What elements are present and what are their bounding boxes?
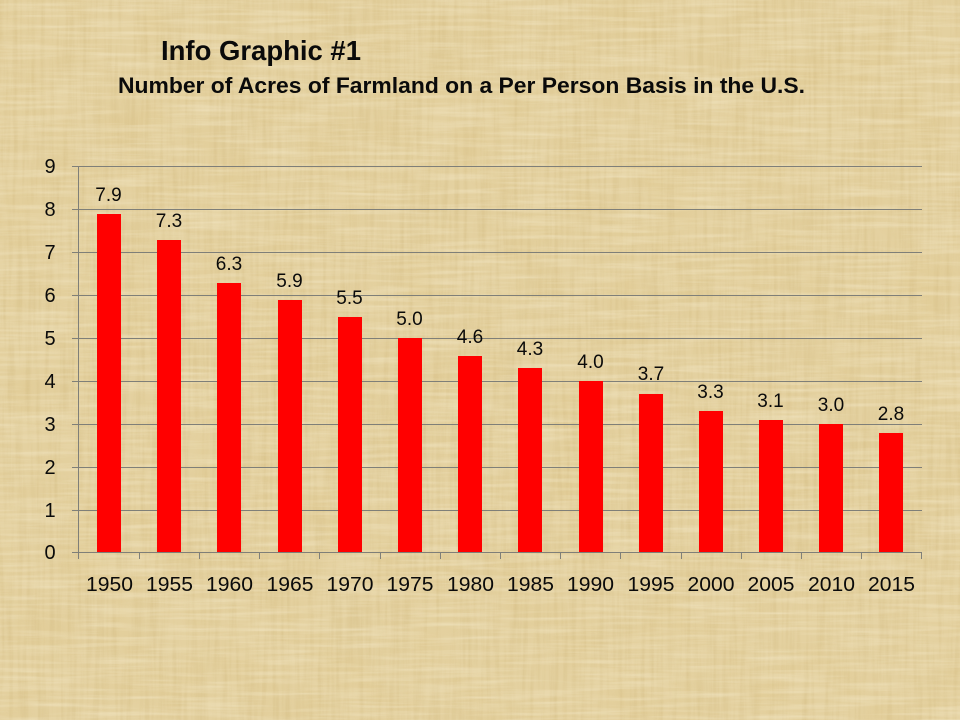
y-axis labels: 5: [44, 328, 56, 350]
bar chart: [44, 156, 922, 596]
value labels: 2.8: [878, 404, 904, 425]
x-axis labels: 2005: [748, 574, 794, 596]
x-axis labels: 1980: [447, 574, 494, 596]
y-axis labels: 0: [44, 542, 56, 564]
y-axis labels: 9: [44, 156, 56, 178]
x-axis labels: [86, 574, 915, 596]
value labels: 5.9: [276, 271, 303, 292]
y-axis labels: 8: [44, 199, 56, 221]
x-axis labels: 2000: [688, 574, 734, 596]
value labels: 3.1: [757, 391, 784, 412]
y-axis labels: 2: [44, 457, 56, 479]
subtitle: Number of Acres of Farmland on a Per Person Basis in the U.S.: [118, 73, 805, 98]
x-axis labels: 1995: [628, 574, 674, 596]
x-axis labels: 1975: [386, 574, 434, 596]
value labels: 3.0: [818, 395, 844, 416]
value labels: 7.9: [95, 185, 122, 206]
value labels: 4.6: [457, 327, 483, 348]
x-axis labels: 2015: [868, 574, 915, 596]
y-axis labels: 3: [44, 414, 56, 436]
value labels: 5.5: [336, 288, 363, 309]
x-axis labels: 1960: [206, 574, 253, 596]
x-axis labels: 1985: [507, 574, 554, 596]
value labels: 7.3: [156, 211, 182, 232]
value labels: [95, 185, 904, 425]
value labels: 3.7: [638, 364, 664, 385]
x-axis labels: 1950: [86, 574, 133, 596]
gridlines and axes: [72, 166, 922, 559]
x-axis labels: 1965: [266, 574, 314, 596]
y-axis labels: 4: [44, 371, 56, 393]
value labels: 6.3: [216, 254, 242, 275]
x-axis labels: 2010: [808, 574, 855, 596]
y-axis labels: 7: [44, 242, 56, 264]
y-axis labels: [44, 156, 56, 564]
y-axis labels: 1: [44, 500, 56, 522]
value labels: 4.0: [577, 352, 604, 373]
x-axis labels: 1955: [146, 574, 193, 596]
title: Info Graphic #1: [161, 35, 361, 66]
value labels: 4.3: [517, 339, 543, 360]
bars: [97, 214, 903, 552]
y-axis labels: 6: [44, 285, 56, 307]
x-axis labels: 1990: [567, 574, 614, 596]
value labels: 3.3: [697, 382, 724, 403]
value labels: 5.0: [396, 309, 423, 330]
x-axis labels: 1970: [326, 574, 374, 596]
